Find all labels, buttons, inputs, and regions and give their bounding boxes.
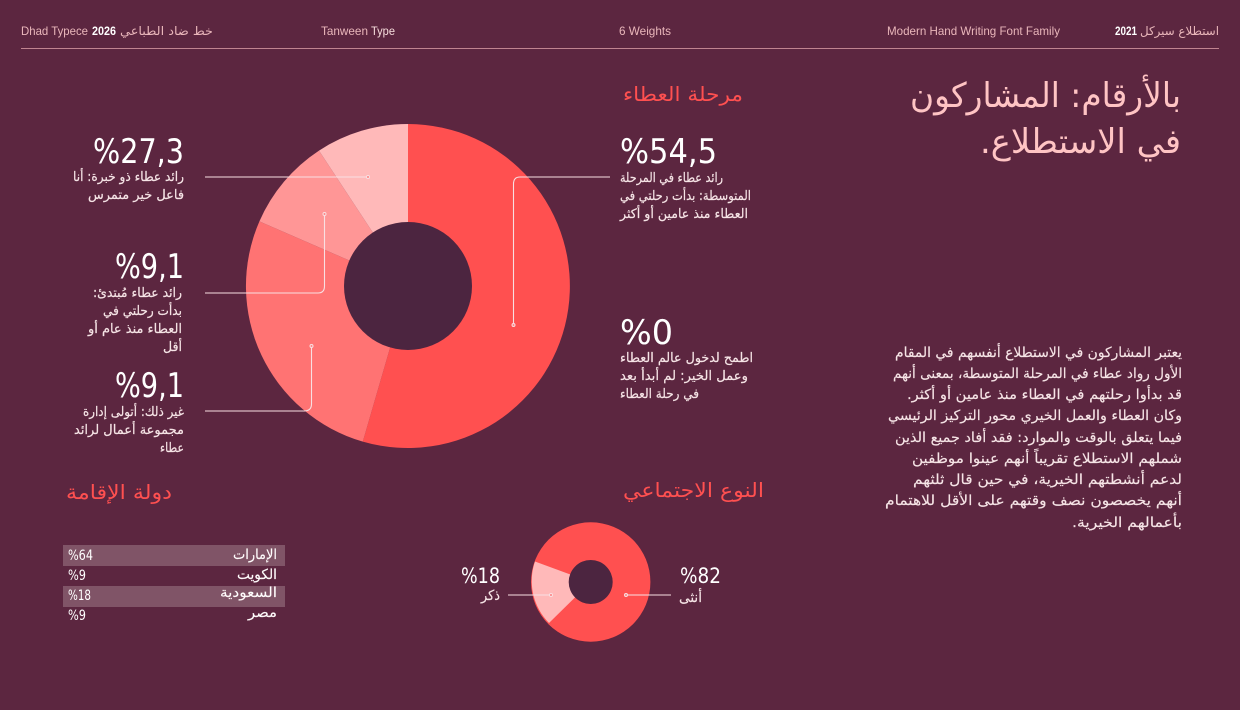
paragraph: لدعم أنشطتهم الخيرية، في حين قال ثلثهم [913, 470, 1182, 488]
stat: male 18 percent [461, 564, 552, 604]
stat: female 82 percent: %82 [680, 564, 721, 588]
table: country of residence: الكويت [237, 567, 277, 583]
stat: male 18 percent: ذكر [480, 588, 500, 604]
heading: gender: النوع الاجتماعي [623, 478, 764, 503]
paragraph: بأعمالهم الخيرية. [1072, 512, 1182, 531]
stat: 54.5 percent: المتوسطة: بدأت رحلتي في [620, 187, 751, 204]
heading: giving stage: مرحلة العطاء [623, 82, 743, 106]
paragraph: وكان العطاء والعمل الخيري محور التركيز الرئيسي [888, 408, 1182, 424]
paragraph: أنهم يخصصون نصف وقتهم على الأقل للاهتمام [885, 491, 1182, 509]
table: country of residence [63, 545, 285, 624]
stat: 9.1 percent other: %9,1 [115, 366, 184, 406]
header bar: Tanween [321, 24, 368, 38]
header bar: Modern Hand Writing Font Family [887, 24, 1060, 38]
leader lines: giving stage [205, 176, 610, 411]
stat: 9.1 percent beginner: العطاء منذ عام أو [87, 320, 182, 337]
title [910, 74, 1181, 162]
stat: 27.3 percent: %27,3 [93, 132, 184, 172]
header bar: Type [371, 24, 395, 38]
stat: 9.1 percent beginner: بدأت رحلتي في [103, 302, 182, 319]
header bar [21, 24, 1219, 49]
stat: 27.3 percent [73, 132, 184, 203]
stat: 9.1 percent other: عطاء [160, 441, 184, 456]
donut chart: gender [531, 522, 650, 642]
stat: 27.3 percent: رائد عطاء ذو خبرة: أنا [73, 168, 184, 185]
stat: 9.1 percent other: غير ذلك: أتولى إدارة [83, 403, 184, 420]
stat: 54.5 percent [619, 132, 751, 222]
table: country of residence: %64 [68, 548, 93, 564]
stat: 9.1 percent beginner: %9,1 [115, 247, 184, 287]
paragraph: يعتبر المشاركون في الاستطلاع أنفسهم في المقام [895, 343, 1182, 361]
stat: 9.1 percent beginner: أقل [163, 338, 182, 355]
header bar: 6 Weights [619, 24, 671, 38]
header bar: استطلاع سيركل [1140, 24, 1219, 39]
stat: 9.1 percent other: مجموعة أعمال لرائد [74, 421, 184, 438]
header bar: خط ضاد الطباعي [120, 24, 213, 38]
stat: 0 percent: اطمح لدخول عالم العطاء [620, 351, 753, 366]
stat: 54.5 percent: العطاء منذ عامين أو أكثر [619, 205, 748, 222]
table: country of residence: %9 [68, 568, 86, 584]
stat: 27.3 percent: فاعل خير متمرس [88, 188, 184, 203]
stat: 0 percent: وعمل الخير: لم أبدأ بعد [620, 367, 748, 384]
stat: 0 percent: %0 [620, 313, 673, 353]
stat: female 82 percent [624, 564, 721, 606]
table: country of residence: السعودية [220, 585, 277, 601]
stat: 54.5 percent: %54,5 [620, 132, 717, 172]
title: في الاستطلاع. [980, 122, 1181, 162]
paragraph: قد بدأوا رحلتهم في العطاء منذ عامين أو أكثر. [907, 385, 1182, 403]
paragraph: فيما يتعلق بالوقت والموارد: فقد أفاد جميع الذين [895, 428, 1182, 446]
paragraph: الأول رواد عطاء في المرحلة المتوسطة، بمعنى أنهم [893, 364, 1182, 382]
header bar: 2026 [92, 24, 116, 38]
stat: 0 percent: في رحلة العطاء [620, 387, 699, 402]
donut chart: giving stage [246, 124, 570, 448]
stat: 9.1 percent other [74, 366, 184, 456]
paragraph: شملهم الاستطلاع تقريباً أنهم عينوا موظفين [912, 448, 1182, 467]
header bar: 2021 [1115, 24, 1137, 38]
title: بالأرقام: المشاركون [910, 74, 1181, 116]
paragraph [885, 343, 1182, 531]
stat: 0 percent [620, 313, 753, 402]
table: country of residence: مصر [247, 605, 277, 621]
stat: female 82 percent: أنثى [679, 588, 702, 606]
table: country of residence: %9 [68, 608, 86, 624]
stat: 9.1 percent beginner: رائد عطاء مُبتدئ: [93, 286, 182, 301]
table: country of residence: %18 [68, 588, 91, 604]
heading: country of residence: دولة الإقامة [66, 480, 172, 504]
stat: 9.1 percent beginner [87, 247, 184, 355]
stat: 54.5 percent: رائد عطاء في المرحلة [620, 171, 723, 186]
stat: male 18 percent: %18 [461, 564, 500, 588]
table: country of residence: الإمارات [233, 547, 277, 563]
header bar: Dhad Typece [21, 24, 88, 38]
